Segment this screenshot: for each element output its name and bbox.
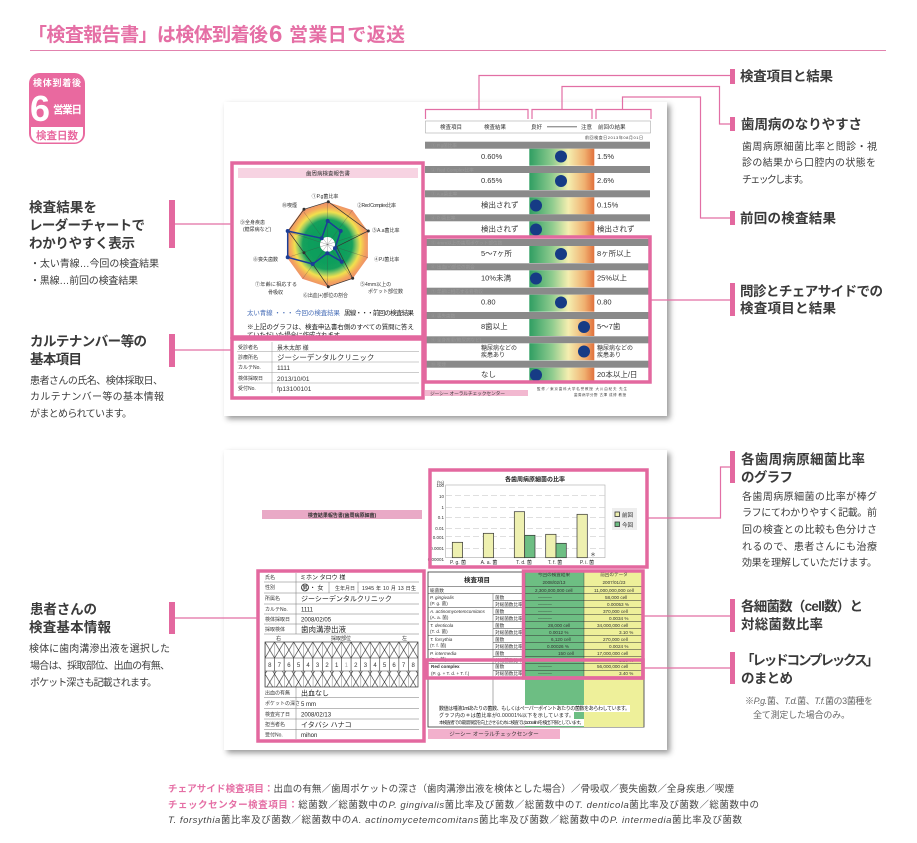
report heading strip: 検査結果報告書(歯周病原細菌) — [308, 512, 376, 519]
callout: interview and chairside — [730, 283, 883, 316]
bacteria ratio table: (A. a. 菌) — [430, 614, 449, 621]
callout: radar chart — [29, 199, 175, 287]
bacteria ratio table: T. denticola — [430, 623, 454, 628]
patient form panel: 出血の有無 — [265, 690, 290, 696]
bacteria ratio table: 対総菌数比率 — [495, 629, 523, 636]
badge: 6 business days: 6 — [30, 88, 50, 129]
result row 7 — [425, 288, 650, 312]
result row 4: ④ P.i菌比率 — [431, 215, 456, 222]
patient basics table: 2013/10/01 — [277, 376, 310, 383]
callout: patient info: 患者さんの — [30, 601, 97, 617]
bacteria ratio table: 0.0034 % — [609, 616, 628, 621]
result row 10 — [425, 361, 650, 382]
bacteria ratio table: 0.00026 % — [547, 644, 569, 649]
callout: cell counts — [730, 598, 863, 632]
patient form panel: 男 ・ 女 — [302, 584, 323, 592]
result row 3: 0.15% — [597, 200, 619, 210]
bacteria ratio table: 3.10 % — [619, 630, 633, 635]
footnote: test items: T. forsythia菌比率及び菌数／総菌数中のA. actinomycetemcomitans菌比率及び菌数／総菌数中のP. intermedia菌比率及び菌数 — [168, 814, 742, 826]
tooth chart: 4 — [373, 663, 377, 669]
result row 6: 10%未満 — [481, 272, 512, 282]
bar chart: bacteria ratios: 0.001 — [433, 535, 444, 540]
title — [28, 21, 405, 48]
bacteria ratio table: 菌数 — [495, 663, 505, 670]
result row 8: 8歯以上 — [481, 321, 508, 331]
patient form panel: 1111 — [301, 608, 314, 614]
callout: periodontal susceptibility: チェックします。 — [742, 174, 809, 186]
bacteria ratio table: ——— — [538, 602, 552, 607]
radar chart — [286, 200, 370, 288]
bacteria ratio table: 対総菌数比率 — [495, 670, 523, 677]
radar axis labels: ①P.g菌比率 — [312, 193, 338, 200]
bacteria ratio table: 総菌数 — [430, 587, 444, 594]
bar chart: bacteria ratios: A. a. 菌 — [481, 559, 497, 566]
patient basics table — [232, 339, 423, 398]
callout: cell counts: 対総菌数比率 — [741, 616, 823, 632]
result row 9: ⑨ 全身疾患(糖尿病など) — [431, 337, 482, 344]
bacteria ratio table: 11,000,000,000 cell — [594, 588, 634, 593]
result row 5: 8ヶ所以上 — [597, 248, 632, 258]
patient form panel: 採取検体 — [265, 626, 285, 633]
bacteria ratio table: (P. i. 菌) — [430, 656, 447, 663]
result row 8: 5〜7歯 — [597, 321, 621, 331]
callout: radar chart: ・黒線…前回の検査結果 — [30, 274, 138, 287]
bacteria ratio table: (P. g. 菌) — [430, 600, 448, 607]
result row 2: 0.65% — [481, 176, 503, 185]
patient form panel — [258, 571, 424, 741]
results table — [425, 121, 650, 382]
tooth chart: 5 — [383, 663, 387, 669]
tooth chart: 1 — [345, 663, 349, 669]
callout: chart number basics: がまとめられています。 — [30, 407, 132, 420]
bacteria ratio table: (P. g. + T. d. + T. f.) — [431, 671, 470, 676]
result row 6 — [425, 263, 650, 287]
bar chart: bacteria ratios: 0.0001 — [430, 546, 444, 551]
result row 4: 検出されず — [597, 224, 634, 234]
bacteria ratio table: T. forsythia — [430, 637, 453, 642]
radar axis labels: ⑤4mm以上の — [360, 281, 391, 288]
bacteria ratio table: 58,000 cell — [605, 595, 627, 600]
badge: 6 business days: 営業日 — [53, 103, 82, 116]
result row 9: 疾患あり — [597, 351, 621, 359]
bacteria ratio table: 370,000 cell — [603, 609, 628, 614]
result row 2 — [425, 166, 650, 190]
patient form panel: 1945 年 10 月 13 日生 — [362, 585, 416, 592]
patient form panel: 2008/02/05 — [301, 618, 332, 624]
patient form panel: 氏名 — [265, 574, 275, 581]
patient basics table: 検体採取日 — [238, 375, 263, 382]
bacteria ratio table: ——— — [538, 609, 552, 614]
title: 営業日で返送 — [289, 24, 405, 46]
result row 2: ② Red Complex比率 — [431, 166, 474, 173]
bacteria ratio table: 対総菌数比率 — [495, 643, 523, 650]
result row 10: ⑩ 喫煙 — [431, 361, 446, 368]
bar chart: bacteria ratios: 100 — [436, 483, 444, 488]
tooth chart: 2 — [325, 663, 329, 669]
result row 10: 20本以上/日 — [597, 369, 637, 379]
report sheet 2 — [224, 450, 667, 750]
footnote: test items — [168, 783, 759, 826]
badge: 6 business days: 検査日数 — [36, 129, 78, 142]
patient form panel: 担当者名 — [265, 721, 285, 728]
bar chart: bacteria ratios: 0.1 — [438, 515, 444, 520]
result row 9: 疾患あり — [481, 351, 505, 359]
bar chart: bacteria ratios: P. i. 菌 — [580, 559, 594, 566]
radar legend: ※上記のグラフは、検査申込書右側のすべての質問に答え — [247, 322, 414, 331]
bacteria ratio table: P. gingivalis — [430, 595, 455, 600]
result row 7: ⑦ 年齢に相応する骨吸収 — [431, 288, 483, 295]
patient form panel: 生年月日 — [335, 585, 355, 592]
footnote: test items: チェアサイド検査項目：出血の有無／歯周ポケットの深さ（歯肉溝滲出液を検体とした場合）／骨吸収／喪失歯数／全身疾患／喫煙 — [168, 783, 734, 795]
bacteria ratio table: 菌数 — [495, 594, 505, 601]
bacteria ratio table: 菌数 — [495, 636, 505, 643]
callout: radar chart: ・太い青線…今回の検査結果 — [30, 257, 159, 270]
callout: bacteria ratio graph: 回の検査との比較も色分けさ — [742, 523, 877, 536]
bacteria ratio table: 56,000,000 cell — [597, 664, 628, 669]
patient form panel: 2008/02/13 — [301, 712, 332, 718]
patient form panel: mihon — [301, 733, 317, 739]
radar legend — [247, 308, 414, 339]
bacteria ratio table: ——— — [538, 595, 552, 600]
patient basics table: 受診者名 — [238, 344, 258, 351]
result row 4: 検出されず — [481, 224, 518, 234]
patient form panel: 採取部位 — [331, 635, 351, 642]
patient basics table: 診療所名 — [238, 354, 258, 361]
callout: red complex: ※P.g.菌、T.d.菌、T.f.菌の3菌種を — [745, 695, 873, 706]
result row 10: なし — [481, 370, 496, 379]
tooth chart: 7 — [278, 663, 282, 669]
bacteria ratio table: 検査項目 — [464, 575, 490, 584]
title: 6 — [269, 21, 282, 48]
patient form panel: イタバシ ハナコ — [301, 720, 352, 729]
patient form panel: ポケットの深さ — [265, 700, 300, 707]
bacteria ratio table: 菌数 — [495, 622, 505, 629]
bacteria ratio table: 本検査者での最低限度を向上させるために検査では100cell/mlを検出下限としています。 — [439, 719, 584, 726]
bacteria ratio table: 0.00053 % — [607, 602, 629, 607]
result row 6: ⑥ 出血(+)部位の割合 — [431, 264, 475, 271]
patient form panel: 5 mm — [301, 702, 316, 708]
bar chart: bacteria ratios: (%) — [437, 480, 444, 485]
results header boxes: 前回の結果 — [598, 123, 626, 131]
chart legend: 前回 — [622, 511, 634, 519]
bar chart: bacteria ratios: T. f. 菌 — [548, 559, 562, 566]
radar axis labels: ④P.i菌比率 — [374, 256, 399, 263]
patient form panel: 検査完了日 — [265, 711, 290, 718]
bar chart: bacteria ratios — [428, 470, 647, 567]
patient basics table: 1111 — [277, 365, 290, 372]
callout: radar chart: レーダーチャートで — [29, 217, 145, 233]
bacteria ratio table: 150 cell — [558, 651, 574, 656]
callout: periodontal susceptibility: 診の結果から口腔内の状態を — [742, 156, 876, 169]
bar chart: bacteria ratios: 1 — [441, 505, 444, 510]
radar axis labels: ⑦年齢に相応する — [255, 281, 297, 288]
callout: chart number basics: カルテナンバー等の — [30, 333, 147, 349]
bacteria ratio table: グラフ内の＊は菌比率が0.00001%以下を示しています。 — [439, 712, 574, 719]
bacteria ratio table: 対総菌数比率 — [495, 615, 523, 622]
bacteria ratio table: 0.0024 % — [609, 644, 628, 649]
bacteria ratio table: 数値は唾液1mlあたりの菌数、もしくはペーパーポイントあたりの菌数をあらわしています。 — [439, 705, 630, 712]
bacteria ratio table: Red complex — [431, 664, 460, 669]
result row 1 — [425, 142, 650, 166]
result row 9 — [425, 336, 650, 360]
patient form panel: 歯肉溝滲出液 — [301, 624, 346, 634]
tooth chart: 8 — [268, 663, 272, 669]
tooth chart: 4 — [306, 663, 310, 669]
bacteria ratio table: 前回のデータ — [600, 571, 628, 578]
callout: bacteria ratio graph: 各歯周病原細菌比率 — [741, 451, 865, 467]
result row 2: 2.6% — [597, 176, 614, 185]
bacteria ratio table: 3.40 % — [619, 671, 633, 676]
patient form panel: ミホン タロウ 様 — [300, 574, 345, 582]
callout: patient info — [29, 601, 175, 689]
results header boxes: 良好 — [531, 123, 543, 131]
bar chart: bacteria ratios: T. d. 菌 — [516, 559, 532, 566]
result row 1: ① P.g菌比率 — [431, 142, 457, 149]
patient form panel: 性別 — [265, 584, 275, 591]
radar axis labels: ⑥出血(+)部位の割合 — [303, 292, 348, 299]
tooth chart — [265, 642, 418, 687]
tooth chart: 7 — [402, 663, 406, 669]
radar axis labels: (糖尿病など) — [243, 226, 272, 233]
callout: red complex — [730, 652, 879, 720]
callout: cell counts: 各細菌数（cell数）と — [741, 598, 863, 614]
tooth chart: 2 — [354, 663, 358, 669]
bacteria ratio table: 2008/02/13 — [542, 580, 566, 585]
bacteria ratio table: 今回の検査結果 — [538, 571, 570, 578]
badge: 6 business days — [30, 74, 84, 144]
tooth chart: 3 — [316, 663, 320, 669]
bacteria ratio table: (T. d. 菌) — [430, 628, 448, 635]
bacteria ratio table: (T. f. 菌) — [430, 642, 447, 649]
tooth chart: 1 — [335, 663, 339, 669]
title rule — [30, 50, 886, 51]
patient form panel: 左 — [402, 635, 407, 642]
tooth chart: 5 — [297, 663, 301, 669]
result row 7: 0.80 — [481, 298, 496, 306]
tooth chart: 6 — [392, 663, 396, 669]
report heading strip — [262, 510, 422, 519]
result row 9: 糖尿病などの — [481, 344, 517, 352]
callout: periodontal susceptibility — [730, 116, 877, 186]
tooth chart: 6 — [287, 663, 291, 669]
radar axis labels: 骨吸収 — [268, 290, 283, 296]
callout: red complex: のまとめ — [741, 671, 793, 686]
result row 7: 0.80 — [597, 298, 612, 306]
results header boxes: 検査結果 — [484, 123, 506, 131]
result row 1: 0.60% — [481, 152, 503, 161]
callout: interview and chairside: 問診とチェアサイドでの — [740, 284, 883, 299]
patient basics table: カルテNo. — [238, 365, 261, 371]
result row 6: 25%以上 — [597, 274, 628, 282]
report sheet 1 — [224, 102, 667, 416]
report footer — [428, 729, 560, 739]
bacteria ratio table: ——— — [538, 664, 552, 669]
radar legend: 太い青線 ・・・ 今回の検査結果 — [247, 308, 340, 317]
callout: red complex: 全て測定した場合のみ。 — [753, 709, 850, 720]
callout: items and results: 検査項目と結果 — [740, 68, 834, 84]
patient basics table: 受付No. — [238, 385, 256, 392]
result row 5: ⑤ 4mm以上の歯周ポケット部位数 — [431, 239, 503, 246]
bacteria ratio table: ——— — [538, 671, 552, 676]
result row 5: 5〜7ヶ所 — [481, 248, 512, 258]
radar legend: 黒線・・・前回の検査結果 — [344, 308, 414, 317]
patient basics table: 景木太郎 様 — [277, 344, 309, 352]
bacteria ratio table: 0.0012 % — [549, 630, 568, 635]
result row 9: 糖尿病などの — [597, 344, 633, 352]
radar axis labels: ⑩喫煙 — [282, 202, 297, 209]
bacteria ratio table: 2,300,000,000 cell — [535, 588, 573, 593]
bacteria ratio table: 菌数 — [495, 650, 505, 657]
callout: bacteria ratio graph: 各歯周病原細菌の比率が棒グ — [742, 490, 877, 503]
patient form panel: 所属名 — [265, 595, 280, 602]
bacteria ratio table: 270,000 cell — [603, 637, 628, 642]
radar axis labels: ⑨全身疾患 — [240, 219, 265, 226]
radar axis labels: ③A.a菌比率 — [372, 227, 400, 234]
callout: previous results: 前回の検査結果 — [740, 210, 836, 226]
bacteria ratio table: A. actinomycetemcomitans — [429, 609, 486, 614]
bacteria ratio table: 28,000 cell — [548, 623, 570, 628]
radar legend: ていただいた場合に作成されます — [247, 330, 340, 339]
callout: periodontal susceptibility: 歯周病原細菌比率と問診・視 — [742, 140, 877, 153]
result row 3: 検出されず — [481, 200, 518, 210]
callout: bacteria ratio graph: れるので、患者さんにも治療 — [742, 540, 877, 553]
patient basics table: ジーシーデンタルクリニック — [277, 352, 374, 362]
result row 3: ③ A.a菌比率 — [431, 191, 458, 198]
bacteria ratio table: ——— — [538, 616, 552, 621]
bar chart: bacteria ratios: P. g. 菌 — [450, 559, 466, 566]
callout: periodontal susceptibility: 歯周病のなりやすさ — [741, 116, 862, 132]
bacteria ratio table: 1.50 % — [619, 658, 633, 663]
callout: patient info: 検査基本情報 — [29, 619, 112, 635]
callout: radar chart: 検査結果を — [29, 199, 97, 215]
callout: bacteria ratio graph: のグラフ — [741, 469, 793, 485]
result row 8: ⑧ 喪失歯数 — [431, 312, 456, 319]
result row 3 — [425, 190, 650, 214]
callout: patient info: 場合は、採取部位、出血の有無、 — [30, 659, 170, 672]
callout: red complex: 「レッドコンプレックス」 — [741, 653, 879, 668]
results header boxes: 前回検査日2013年08月01日 — [585, 134, 643, 140]
patient form panel: ジーシーデンタルクリニック — [301, 594, 392, 603]
bacteria ratio table: 対総菌数比率 — [495, 657, 523, 664]
radar axis labels: ⑧喪失歯数 — [253, 256, 278, 263]
bacteria ratio table: 対総菌数比率 — [495, 601, 523, 608]
footnote: test items: チェックセンター検査項目：総菌数／総菌数中のP. gingivalis菌比率及び菌数／総菌数中のT. denticola菌比率及び菌数／総菌数中の — [168, 799, 759, 811]
result row 5 — [425, 239, 650, 263]
callout: chart number basics: 基本項目 — [30, 351, 82, 367]
callout: interview and chairside: 検査項目と結果 — [740, 300, 836, 316]
callout: chart number basics: 患者さんの氏名、検体採取日、 — [30, 374, 163, 387]
bacteria ratio table: P. intermedia — [430, 651, 457, 656]
tooth chart: 3 — [364, 663, 368, 669]
callout: bacteria ratio graph: ラフにてわかりやすく記載。前 — [742, 506, 877, 519]
bacteria ratio table: 6,120 cell — [551, 637, 571, 642]
bar chart: bacteria ratios: 10 — [439, 494, 444, 499]
top brackets and connectors — [175, 76, 730, 668]
patient form panel: カルテNo. — [265, 607, 288, 613]
tooth chart: 8 — [412, 663, 416, 669]
chart legend: 今回 — [622, 521, 634, 529]
radar report panel: 歯周病検査報告書 — [306, 170, 350, 178]
bar chart: bacteria ratios: 0.00001 — [428, 557, 444, 562]
report footer: ジーシー オーラルチェックセンター — [430, 390, 505, 397]
bacteria ratio table: 34,000,000 cell — [597, 623, 628, 628]
report footer: 監修／東京歯科大学名誉教授 大川由紀夫 先生 — [537, 386, 628, 391]
bacteria ratio table: 2007/01/23 — [602, 580, 626, 585]
bacteria ratio table: 菌数 — [495, 608, 505, 615]
report footer: ジーシー オーラルチェックセンター — [449, 730, 539, 738]
bar chart: bacteria ratios: ＊ — [590, 552, 596, 559]
report footer — [425, 386, 628, 397]
radar axis labels: ポケット部位数 — [368, 288, 403, 295]
result row 1: 1.5% — [597, 152, 614, 161]
results header boxes: 注意 — [581, 123, 593, 131]
report footer: 歯周病学分野 古澤 成博 教授 — [574, 392, 626, 397]
bar chart: bacteria ratios: 各歯周病原細菌の比率 — [505, 476, 565, 484]
bacteria ratio table: 17,000,000 cell — [597, 651, 628, 656]
results header boxes: 検査項目 — [440, 123, 462, 131]
callout: patient info: 検体に歯肉溝滲出液を選択した — [29, 642, 170, 655]
results header boxes — [426, 121, 650, 140]
result row 4 — [425, 214, 650, 236]
callout: chart number basics: カルテナンバー等の基本情報 — [30, 390, 164, 403]
patient form panel: 出血なし — [301, 688, 329, 698]
callout: bacteria ratio graph — [730, 451, 877, 569]
callout: patient info: ポケット深さも記載されます。 — [30, 677, 157, 689]
callout: radar chart: わかりやすく表示 — [29, 235, 135, 251]
callout: bacteria ratio graph: 効果を理解していただけます。 — [742, 556, 877, 569]
result row 8 — [425, 312, 650, 336]
radar axis labels: ②Red Complex比率 — [357, 202, 396, 209]
patient form panel: 右 — [276, 635, 281, 642]
title: 「検査報告書」は検体到着後 — [28, 23, 268, 46]
patient basics table: fp13100101 — [277, 386, 312, 393]
badge: 6 business days: 検体到着後 — [33, 77, 81, 88]
radar axis labels — [240, 193, 403, 299]
patient form panel: 受付No. — [265, 732, 283, 738]
callout: chart number basics — [30, 333, 175, 420]
patient form panel: 検体採取日 — [265, 616, 290, 623]
bar chart: bacteria ratios: 0.01 — [435, 526, 444, 531]
chart legend — [612, 508, 637, 530]
bacteria ratio table — [427, 571, 644, 727]
radar report panel — [232, 163, 423, 340]
